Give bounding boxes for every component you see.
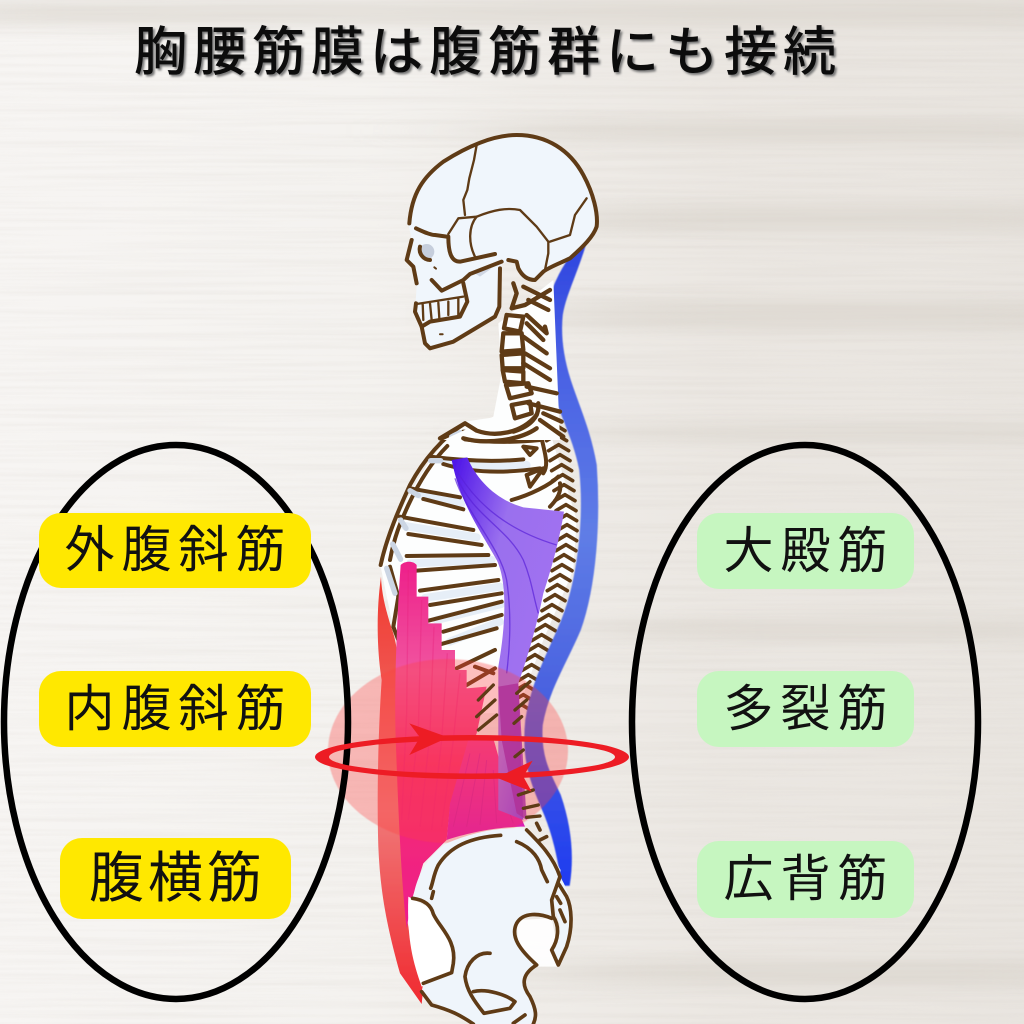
label: 広背筋 [697,841,914,918]
muscle: thoracolumbar fascia (blue) [525,245,597,885]
label: 内腹斜筋 [39,671,311,747]
pelvis [408,823,571,1024]
muscle: rectus abdominis (red) [378,577,424,1004]
label: 大殿筋: 大殿筋 [724,523,894,579]
thoracic and lumbar vertebrae [512,425,577,711]
highlight circle [328,659,568,843]
skull and cervical spine [407,135,597,441]
label: 外腹斜筋 [39,513,311,588]
label: 腹横筋 [60,838,291,919]
muscle: latissimus (purple) [452,457,564,820]
label: 外腹斜筋: 外腹斜筋 [64,522,292,578]
label: 多裂筋: 多裂筋 [724,681,894,737]
label: 内腹斜筋: 内腹斜筋 [64,681,292,737]
label: 多裂筋 [697,671,914,747]
ribcage and spine [381,410,577,713]
label: 広背筋: 広背筋 [724,851,894,907]
label: 腹横筋: 腹横筋 [89,847,266,909]
lower spine hatch [477,682,540,817]
title: 胸腰筋膜は腹筋群にも接続 [134,23,842,82]
cervical vertebrae [440,283,563,441]
muscle: internal fan (magenta) [447,738,525,840]
label: 大殿筋 [697,513,914,589]
muscle: external oblique (pink stepped) [395,562,487,928]
